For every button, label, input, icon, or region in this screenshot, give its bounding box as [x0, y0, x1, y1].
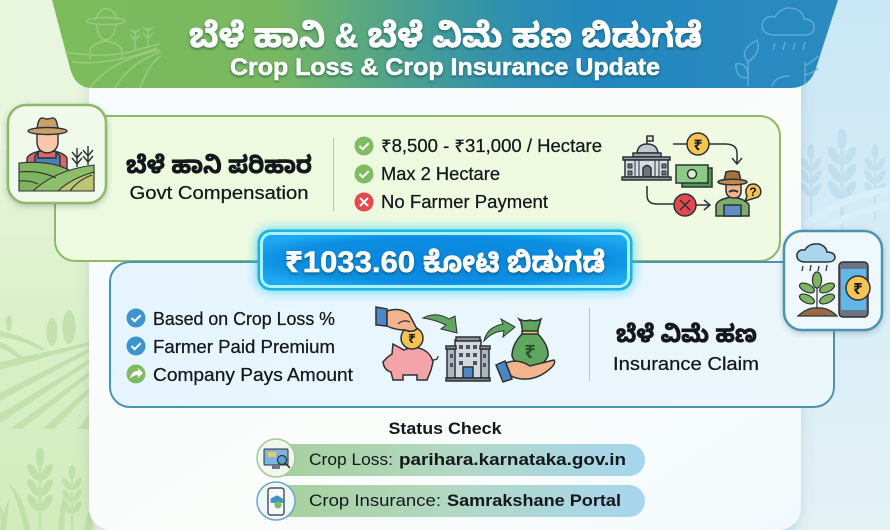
claim basis: Based on Crop Loss %: [153, 309, 335, 329]
insurance link: [309, 491, 621, 510]
icon: check blue: [126, 308, 146, 328]
amount text: ₹1033.60: [285, 246, 415, 279]
money bag in hand: [496, 319, 555, 382]
crop loss link: Crop Loss:: [309, 450, 393, 469]
crossed path: [647, 186, 710, 216]
white content panel: [89, 60, 801, 530]
subheading: Govt Compensation: [130, 183, 308, 203]
government building: [622, 136, 671, 180]
company pays: Company Pays Amount: [153, 365, 353, 385]
panel: govt compensation: [55, 116, 780, 261]
heading: crop loss compensation: ಬೆಳೆ ಹಾನಿ ಪರಿಹಾರ: [126, 152, 312, 179]
plant: [798, 272, 837, 316]
benefit limit: Max 2 Hectare: [381, 164, 500, 184]
icon tile: crop and phone: [784, 231, 882, 330]
icon: government to farmer money flow: [622, 133, 761, 216]
rain cloud: [797, 244, 835, 271]
farmer: ?: [749, 185, 757, 199]
status row: crop insurance: [257, 482, 645, 520]
icon: check blue: [126, 336, 146, 356]
subtitle: Crop Loss & Crop Insurance Update: [230, 54, 660, 81]
farmer figure: [27, 118, 67, 172]
icon: piggy bank to company to money bag: [376, 307, 555, 382]
premium: Farmer Paid Premium: [153, 337, 335, 357]
icon tile: farmer: [8, 105, 106, 203]
crop loss link: [309, 450, 626, 469]
header banner: [52, 0, 838, 88]
small crops: [72, 146, 93, 167]
crop loss link: parihara.karnataka.gov.in: [399, 450, 626, 469]
heading: insurance money: ಬೆಳೆ ವಿಮೆ ಹಣ: [616, 321, 757, 348]
status check heading: Status Check: [388, 419, 502, 438]
piggy bank: [383, 344, 433, 380]
status row: crop loss: [257, 439, 645, 477]
subheading: Insurance Claim: [613, 354, 759, 374]
green arrow: [423, 315, 457, 333]
amount banner: [258, 230, 632, 290]
icon: cross red: [354, 192, 374, 212]
insurance link: Crop Insurance:: [309, 491, 441, 510]
amount text: ಕೋಟಿ ಬಿಡುಗಡೆ: [423, 247, 605, 279]
icon: phone with cloud shield: [257, 482, 295, 520]
hand with coin: [376, 307, 423, 349]
rupee coin: ₹: [694, 137, 702, 154]
insurance link: Samrakshane Portal: [447, 491, 621, 510]
pig tail: [433, 356, 438, 360]
header watermark: rain cloud and plants: [736, 8, 818, 86]
benefit amount: ₹8,500 - ₹31,000 / Hectare: [381, 136, 602, 156]
no farmer payment: No Farmer Payment: [381, 192, 548, 212]
icon: check green: [354, 164, 374, 184]
header watermark: farmer and field: [65, 9, 161, 88]
icon: check green: [354, 136, 374, 156]
icon: arrow green: [126, 364, 146, 384]
hand with coin: ₹: [408, 331, 416, 346]
icon: monitor search: [257, 439, 295, 477]
money bag in hand: ₹: [525, 342, 535, 363]
green arrow: [484, 319, 515, 341]
green field: [19, 162, 94, 191]
phone with rupee: ₹: [853, 281, 863, 298]
panel: insurance claim: [110, 262, 834, 407]
company building: [446, 337, 490, 381]
title: ಬೆಳೆ ಹಾನಿ & ಬೆಳೆ ವಿಮೆ ಹಣ ಬಿಡುಗಡೆ: [189, 17, 702, 55]
banknotes: [676, 165, 712, 187]
amount text: [285, 246, 605, 279]
